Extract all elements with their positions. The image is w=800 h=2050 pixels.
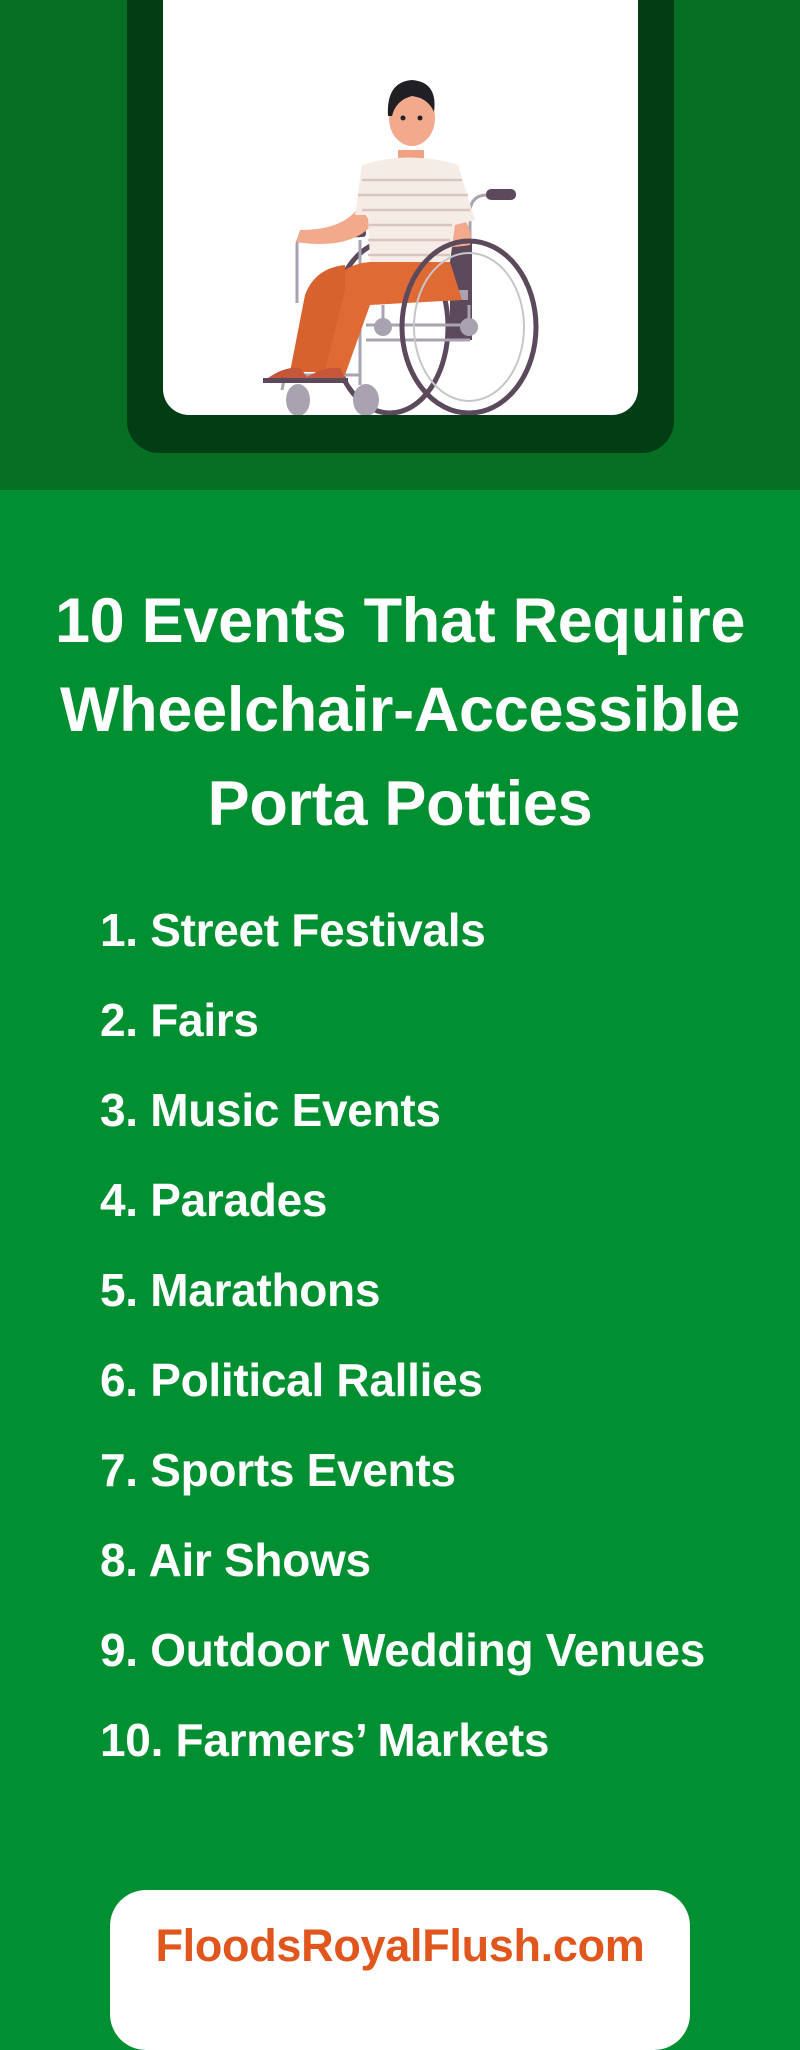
- list of events: [100, 904, 705, 1766]
- website url: FloodsRoyalFlush.com: [155, 1920, 645, 1971]
- list of events: 3. Music Events: [100, 1084, 441, 1136]
- list of events: 7. Sports Events: [100, 1444, 456, 1496]
- illustration window: man in wheelchair: [163, 0, 638, 415]
- footer pill: [110, 1890, 690, 2050]
- list of events: 2. Fairs: [100, 994, 259, 1046]
- frame panel: [127, 0, 674, 453]
- list of events: 6. Political Rallies: [100, 1354, 483, 1406]
- list of events: 1. Street Festivals: [100, 904, 486, 956]
- title: Wheelchair-Accessible: [60, 675, 740, 745]
- icon: wheelchair person: [263, 80, 536, 416]
- list of events: 5. Marathons: [100, 1264, 380, 1316]
- list of events: 10. Farmers’ Markets: [100, 1714, 549, 1766]
- title: [55, 586, 745, 839]
- list of events: 4. Parades: [100, 1174, 327, 1226]
- header band: [0, 0, 800, 490]
- list of events: 8. Air Shows: [100, 1534, 371, 1586]
- list of events: 9. Outdoor Wedding Venues: [100, 1624, 705, 1676]
- title: Porta Potties: [208, 769, 592, 839]
- title: 10 Events That Require: [55, 586, 745, 656]
